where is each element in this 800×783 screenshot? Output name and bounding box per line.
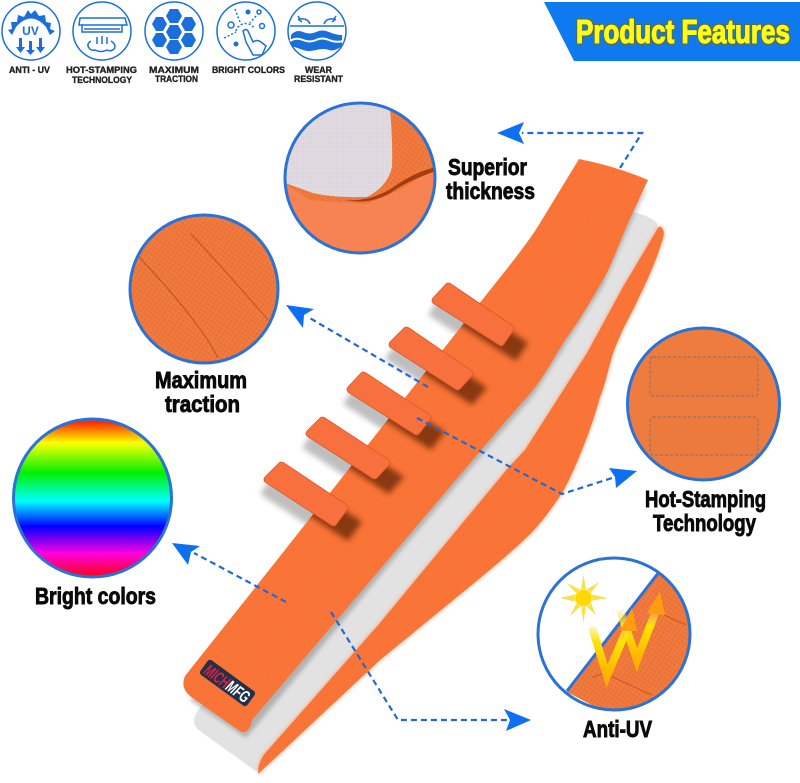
arrow: to hot-stamping bbox=[417, 418, 637, 494]
label: Technology bbox=[653, 510, 756, 536]
detail circle: rainbow bbox=[14, 419, 172, 577]
traction tab 5 bbox=[264, 462, 348, 526]
gray seat base bbox=[194, 195, 658, 772]
brand badge bbox=[198, 659, 256, 709]
icon caption: wear resistant bbox=[294, 65, 343, 85]
brand badge: MFG bbox=[222, 677, 254, 707]
panel: anti-UV bbox=[538, 558, 700, 742]
gray tab shadows on background bbox=[260, 297, 510, 540]
icon caption: hot-stamping technology bbox=[66, 65, 137, 86]
icon: touch colors bbox=[217, 2, 275, 60]
icon caption: wear resistant: RESISTANT bbox=[294, 74, 343, 85]
label: thickness bbox=[446, 178, 535, 204]
panel: maximum traction bbox=[130, 215, 278, 417]
label: Bright colors bbox=[35, 583, 156, 609]
arrow: to superior thickness bbox=[497, 122, 642, 168]
detail circle: traction ribs bbox=[130, 215, 278, 363]
icon caption: hot-stamping technology: HOT-STAMPING bbox=[66, 65, 137, 76]
panel: hot-stamping technology bbox=[628, 328, 780, 536]
arrow: to bright colors bbox=[172, 543, 286, 602]
title banner bbox=[544, 2, 800, 61]
detail circle: layered material bbox=[280, 100, 440, 260]
icon caption: wear resistant: WEAR bbox=[305, 65, 332, 76]
traction tab 1 bbox=[432, 283, 514, 346]
panel: bright colors bbox=[14, 419, 172, 609]
panel: superior thickness bbox=[280, 100, 535, 260]
label: Superior bbox=[448, 154, 527, 180]
detail circle: sun and rays bbox=[538, 558, 700, 720]
label: Maximum bbox=[155, 367, 247, 393]
detail circle: stamped panels bbox=[628, 328, 780, 480]
label: Anti-UV bbox=[583, 716, 653, 742]
main orange panel bbox=[183, 159, 648, 732]
icon row bbox=[2, 2, 346, 86]
main panel shadow bbox=[190, 186, 648, 738]
label bbox=[155, 367, 247, 417]
label bbox=[446, 154, 535, 204]
brand badge: MICH bbox=[200, 661, 234, 692]
label bbox=[645, 486, 766, 536]
icon caption: anti-UV: ANTI - UV bbox=[9, 65, 51, 76]
product: seat cover bbox=[183, 159, 664, 774]
icon caption: bright colors: BRIGHT COLORS bbox=[212, 65, 285, 76]
right orange strip bbox=[258, 226, 664, 774]
rising arrows bbox=[592, 592, 665, 676]
icon: anti-UV bbox=[2, 2, 60, 60]
traction tab 4 bbox=[306, 417, 390, 479]
label: traction bbox=[165, 391, 240, 417]
icon: hot stamping machine bbox=[73, 2, 131, 60]
traction tab 2 bbox=[389, 327, 473, 390]
arrow: to anti-UV bbox=[331, 612, 531, 731]
traction tab shadows on panel bbox=[309, 323, 530, 544]
icon: hexagons bbox=[145, 2, 203, 60]
icon caption: maximum traction: TRACTION bbox=[155, 74, 198, 85]
sun bbox=[560, 575, 608, 623]
icon: anti-UV: UV bbox=[22, 24, 39, 38]
icon caption: hot-stamping technology: TECHNOLOGY bbox=[72, 75, 133, 86]
icon: wear resistant waves bbox=[288, 2, 346, 60]
traction tab 3 bbox=[347, 372, 431, 435]
arrow: to maximum traction bbox=[286, 305, 428, 387]
icon caption: maximum traction bbox=[149, 65, 199, 85]
icon caption: maximum traction: MAXIMUM bbox=[149, 65, 199, 76]
label: Hot-Stamping bbox=[645, 486, 766, 512]
